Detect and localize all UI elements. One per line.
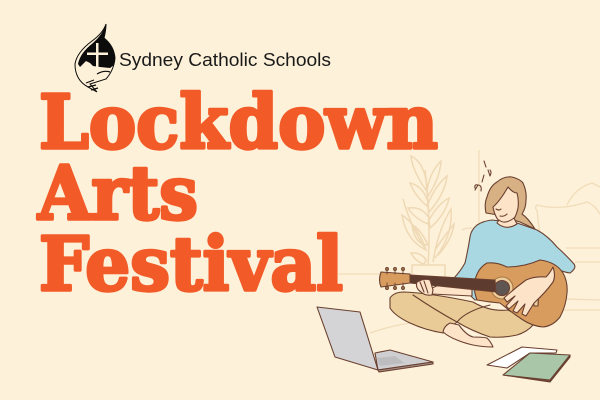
guitar headstock: [380, 272, 410, 287]
title line: Lockdown: Lockdown: [39, 80, 438, 166]
laptop trackpad: [377, 356, 404, 366]
room background lines: [338, 150, 600, 333]
notebook: [503, 353, 570, 382]
neck: [497, 218, 517, 227]
guitar bridge: [532, 285, 539, 306]
title line: Arts: Arts: [37, 151, 198, 237]
potted plant: [402, 156, 454, 280]
facial features: [496, 209, 507, 216]
title: [37, 80, 438, 308]
right hand and arm: [504, 267, 554, 316]
left hand: [416, 279, 433, 295]
face: [493, 187, 518, 224]
title line: Festival: Festival: [39, 222, 343, 308]
laptop edge: [378, 362, 433, 372]
forearm: [432, 279, 472, 296]
logo: Sydney Catholic Schools: [75, 24, 331, 92]
laptop screen: [317, 307, 378, 370]
guitar pegs: [386, 268, 404, 290]
hair: [485, 177, 535, 229]
guitar sound hole: [491, 277, 513, 299]
foot: [443, 323, 493, 347]
laptop base: [375, 350, 433, 370]
logo wordmark: Sydney Catholic Schools: [119, 49, 331, 70]
guitar body: [474, 260, 567, 327]
sheet of paper: [487, 347, 557, 368]
guitar neck: [410, 275, 496, 292]
illustration: woman playing guitar: [317, 161, 575, 382]
sweater: [453, 220, 575, 300]
legs: [390, 292, 533, 337]
icon: flame emblem with cross: [75, 24, 115, 92]
icon: music notes: [475, 161, 491, 191]
